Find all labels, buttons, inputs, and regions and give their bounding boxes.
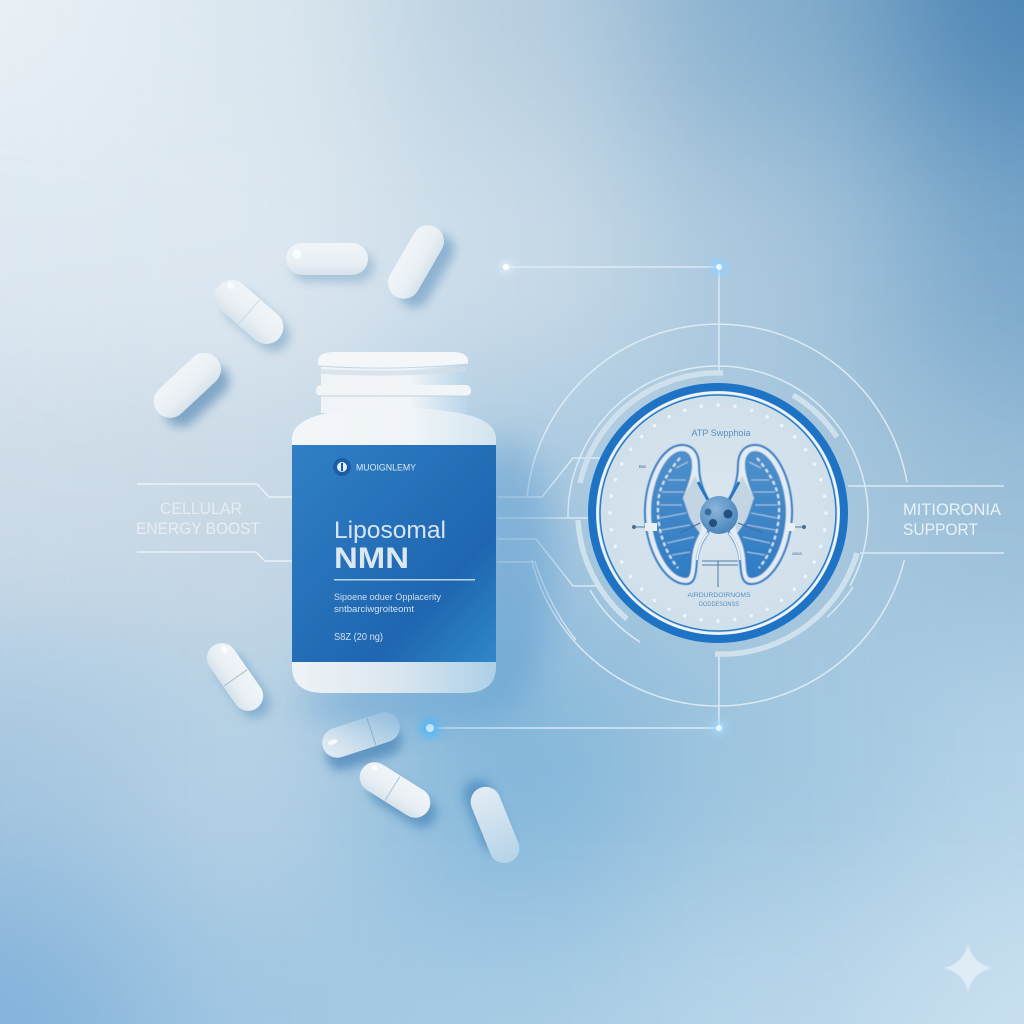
diagram annotations: DODDESONSS xyxy=(699,602,739,608)
diagram annotations: AIRDURDOIRNOMS xyxy=(688,592,751,599)
capsule 1 xyxy=(286,243,374,282)
bottle label xyxy=(292,445,496,662)
supplement bottle xyxy=(292,352,555,726)
bottle label: NMN xyxy=(334,542,409,575)
left callout: cellular energy boost: ENERGY BOOST xyxy=(136,520,260,538)
bottle shoulder xyxy=(292,408,496,446)
product description: Sipoene oduer Opplacerity xyxy=(334,592,441,603)
right callout: mitochondria support xyxy=(903,501,1001,539)
brand mark: MUOIGNLEMY xyxy=(356,462,417,474)
capsules: upper group xyxy=(147,219,460,434)
capsules: lower group xyxy=(201,637,524,868)
product name: Liposomal xyxy=(334,517,446,544)
right callout: mitochondria support: SUPPORT xyxy=(903,521,978,539)
capsule 5 xyxy=(201,637,276,724)
bottle shadow xyxy=(300,440,555,726)
bottle base xyxy=(292,655,496,693)
right mitochondrion xyxy=(729,445,792,584)
left mitochondrion xyxy=(645,445,708,584)
diagram annotations: Bar xyxy=(639,464,647,469)
diagram annotations xyxy=(632,464,806,608)
connector lines and outer rings xyxy=(430,267,1004,728)
disc xyxy=(592,387,844,639)
capsule 7 xyxy=(354,757,442,833)
left callout: cellular energy boost: CELLULAR xyxy=(160,500,242,518)
left callout: cellular energy boost xyxy=(136,484,292,561)
diagram annotations: onus xyxy=(792,551,803,556)
capsule 2 xyxy=(382,219,460,313)
product dose: S8Z (20 ng) xyxy=(334,632,383,643)
mitochondria diagram badge xyxy=(578,373,857,654)
capsule 6 xyxy=(318,708,406,774)
bottle label: sntbarciwgroiteomt xyxy=(334,604,414,615)
glowing connector nodes xyxy=(420,259,727,738)
dotted ring xyxy=(610,405,826,621)
sparkle icon xyxy=(944,944,992,992)
diagram title: ATP Swpphoia xyxy=(692,428,751,439)
capsule 8 xyxy=(459,775,524,868)
central organelle xyxy=(680,482,763,560)
right callout: mitochondria support: MITIORONIA xyxy=(903,501,1001,519)
capsule 3 xyxy=(208,273,296,358)
brand mark xyxy=(333,458,417,476)
outer accents xyxy=(578,373,857,654)
capsule 4 xyxy=(147,346,236,434)
bottle cap xyxy=(316,352,471,413)
